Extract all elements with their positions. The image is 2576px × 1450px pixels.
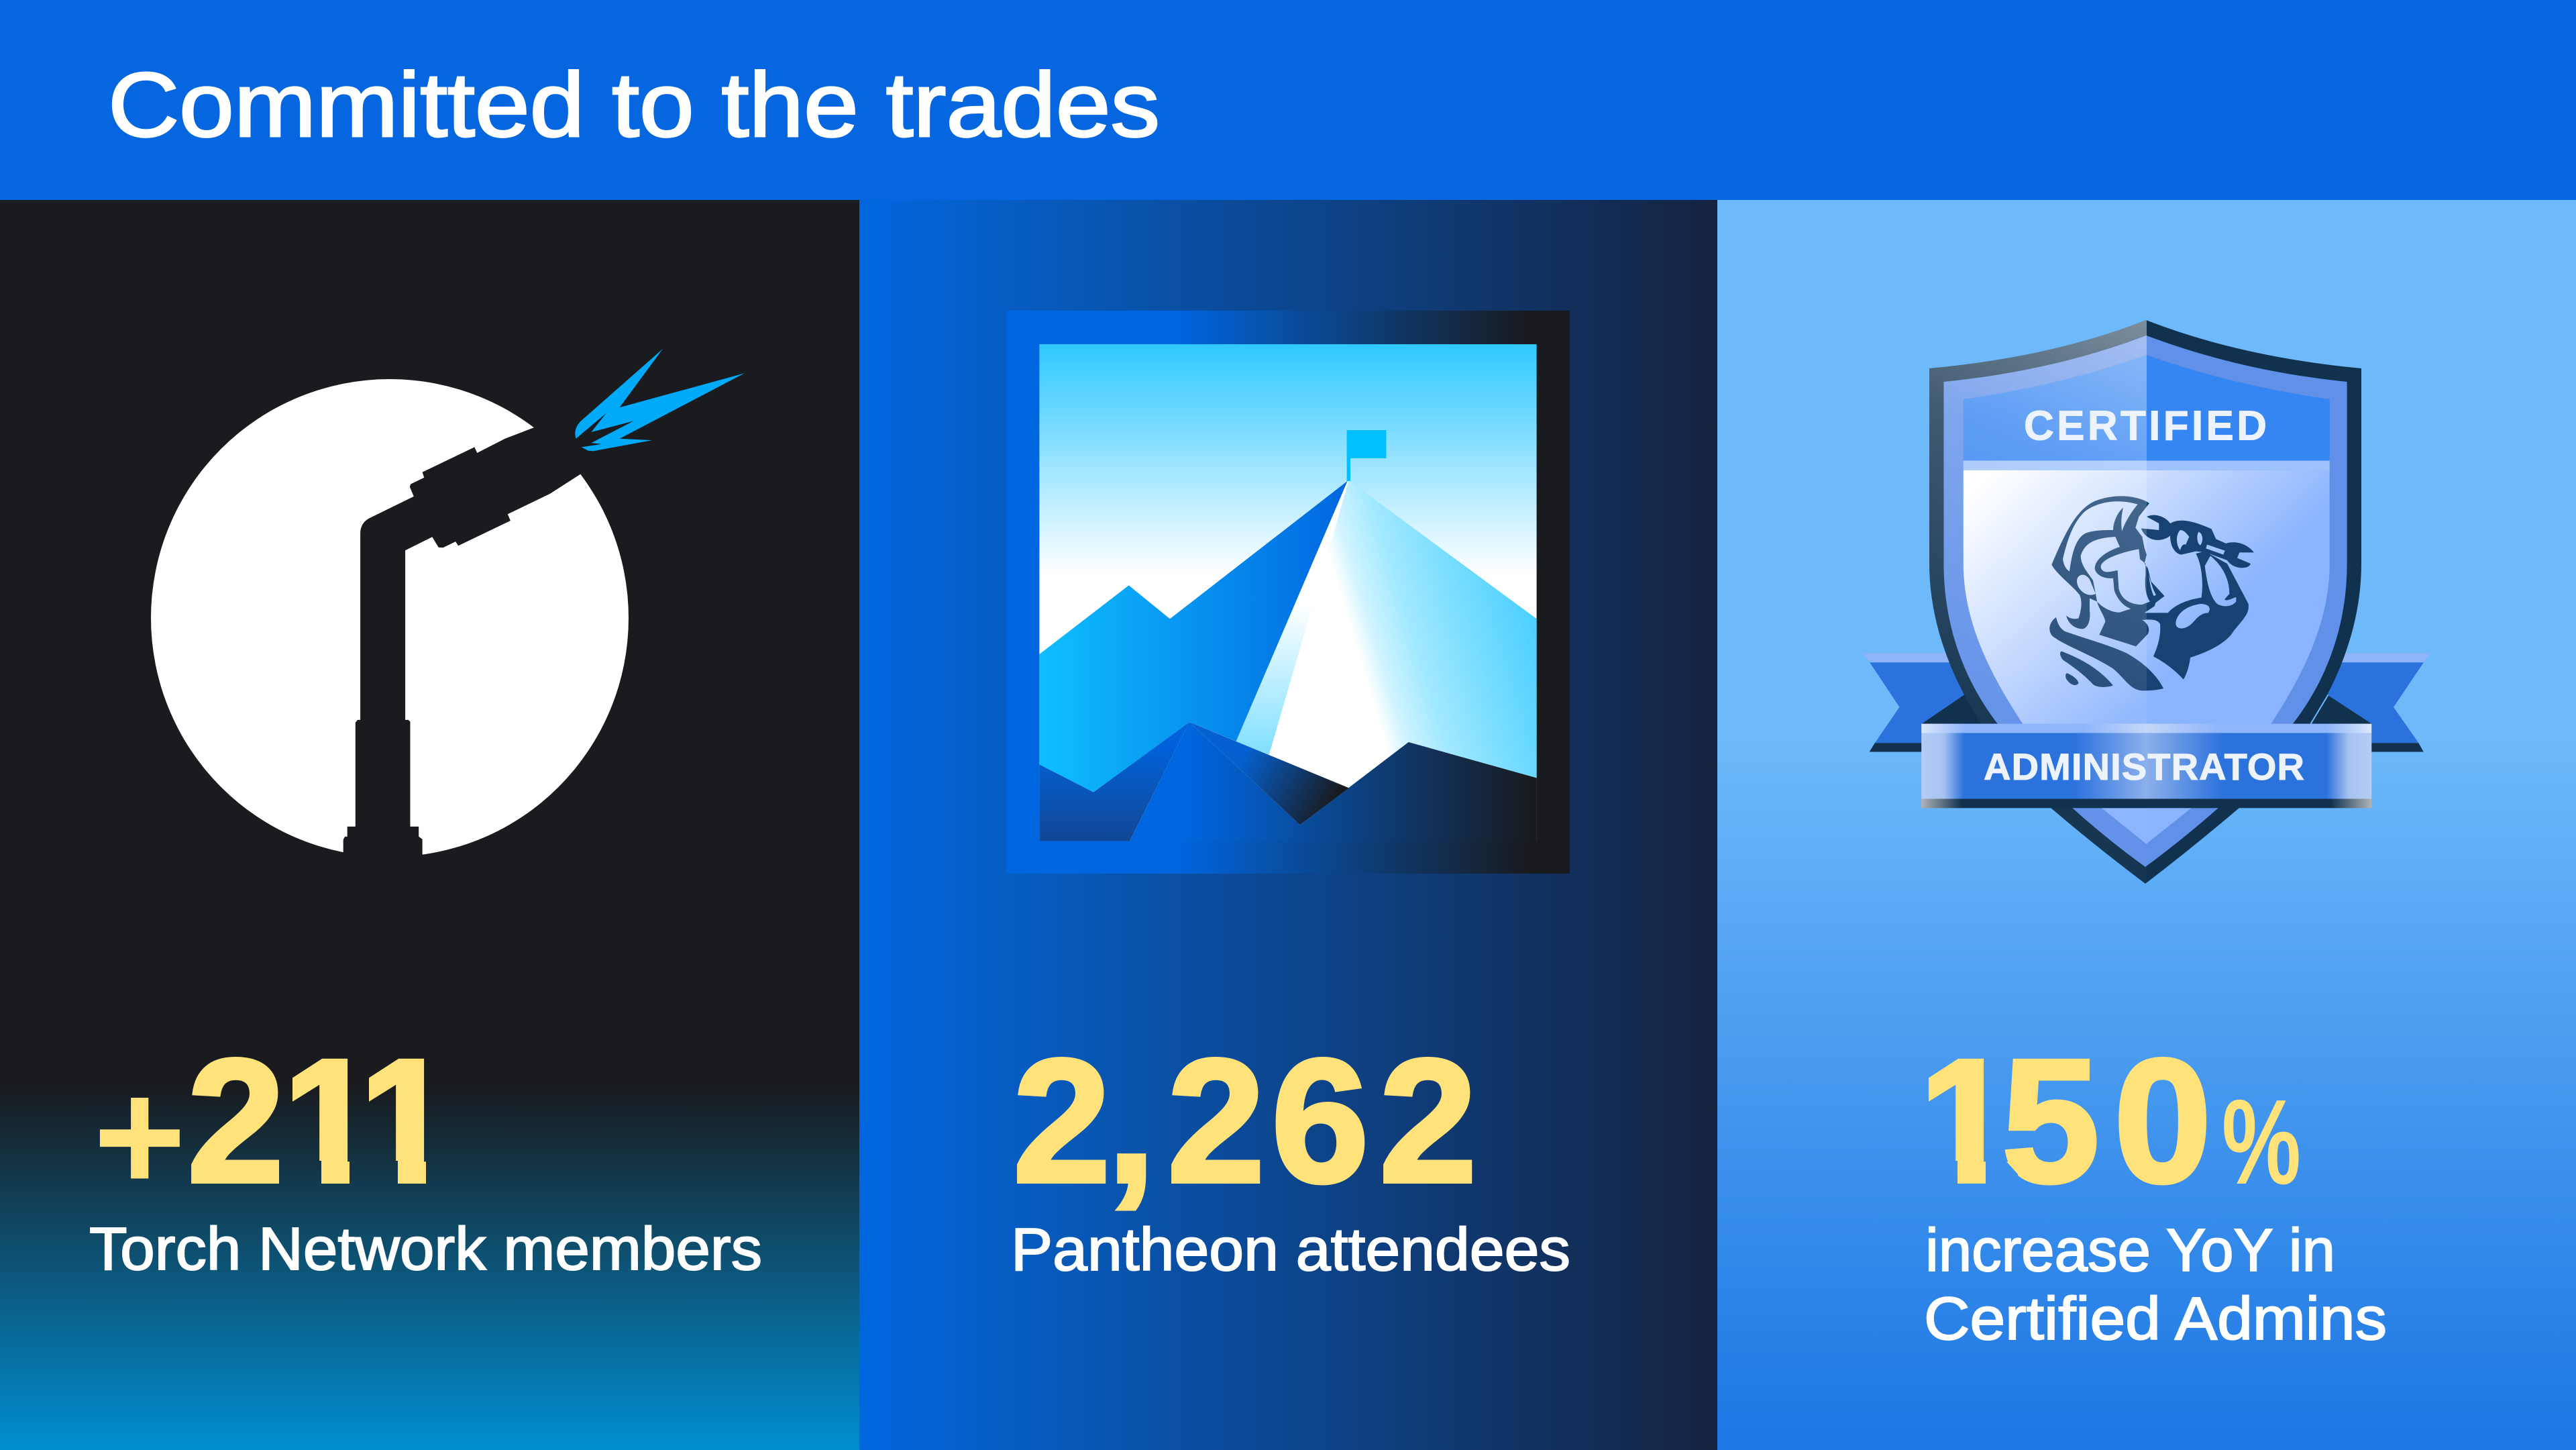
icon: smokestack and flame — [151, 349, 745, 872]
stat: percent sign: % — [2222, 1075, 2301, 1210]
badge text: ADMINISTRATOR: ADMINISTRATOR — [1984, 745, 2304, 788]
stat: +211 — [99, 1057, 426, 1184]
ribbon edge highlight — [2311, 695, 2328, 724]
shield — [1929, 320, 2361, 884]
badge text: CERTIFIED: CERTIFIED — [2024, 403, 2267, 450]
panel: Torch Network members — [0, 349, 859, 1450]
title: Committed to the trades — [108, 54, 1160, 156]
stat: +211: + — [93, 1047, 186, 1225]
label: increase YoY in Certified Admins: increase YoY in — [1925, 1217, 2335, 1284]
banner: administrator — [1921, 724, 2371, 808]
icon: flag — [1347, 430, 1386, 481]
shield sheen — [1929, 320, 2147, 884]
label: increase YoY in Certified Admins — [1924, 1217, 2387, 1353]
label: increase YoY in Certified Admins: Certified Admins — [1924, 1286, 2387, 1353]
icon: certified administrator badge — [1863, 320, 2430, 884]
stat: 2,262: 2,262 — [1013, 1023, 1477, 1219]
stat: 150: 150 — [1917, 1023, 2212, 1219]
icon: worker with wrench — [2049, 496, 2254, 690]
icon: mountain with flag — [1006, 311, 1570, 874]
stat: +211: 211 — [187, 1023, 455, 1219]
panel: Pantheon attendees — [859, 200, 1717, 1450]
label: Torch Network members: Torch Network members — [89, 1216, 762, 1283]
header band — [0, 0, 2576, 200]
label: Pantheon attendees: Pantheon attendees — [1011, 1216, 1570, 1284]
ribbon tails — [1863, 654, 2430, 752]
panel: Certified Admins — [1717, 200, 2576, 1450]
